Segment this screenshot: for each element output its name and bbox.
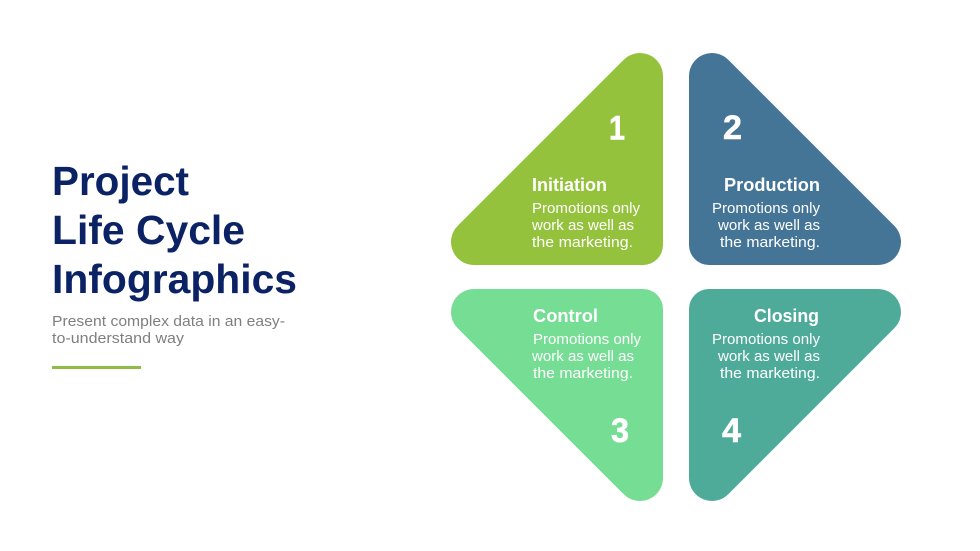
text: description: Promotions only [533,331,641,348]
triangle: green [451,53,663,265]
triangle: teal [689,289,901,501]
heading: Control: Control [533,305,598,326]
number 4: 4 [722,412,741,450]
title: Project [52,158,189,204]
title: Life Cycle [52,207,245,253]
text: description: the marketing. [720,365,820,382]
title: Infographics [52,256,297,302]
subtitle: Present complex data in an easy- [52,313,285,330]
text: description [712,200,820,251]
accent line [52,366,141,369]
text: description: Promotions only [712,200,820,217]
number 3: 3 [611,412,629,450]
left title block [52,158,297,369]
text: description: work as well as [717,348,820,365]
panel: 2 Production [689,53,901,265]
text: description: Promotions only [532,200,640,217]
heading: Closing: Closing [754,305,819,326]
number 1: 1 [609,110,625,148]
text: description: Promotions only [712,331,820,348]
text: description: work as well as [531,217,634,234]
text: description: the marketing. [533,365,633,382]
subtitle: to-understand way [52,330,185,347]
number 2: 2 [723,109,742,147]
text: description [712,331,820,382]
text: description: the marketing. [720,234,820,251]
panel: 1 Initiation [451,53,663,265]
text: description: work as well as [531,348,634,365]
text: description: the marketing. [532,234,633,251]
panel: 4 Closing [689,289,901,501]
text: description [531,200,640,251]
triangle: blue [689,53,901,265]
text: description: work as well as [717,217,820,234]
subtitle [52,313,285,347]
text: description [531,331,641,382]
title [52,158,297,302]
heading: Initiation: Initiation [532,174,607,195]
triangle: light green [451,289,663,501]
panel: 3 Control [451,289,663,501]
heading: Production: Production [724,174,820,195]
